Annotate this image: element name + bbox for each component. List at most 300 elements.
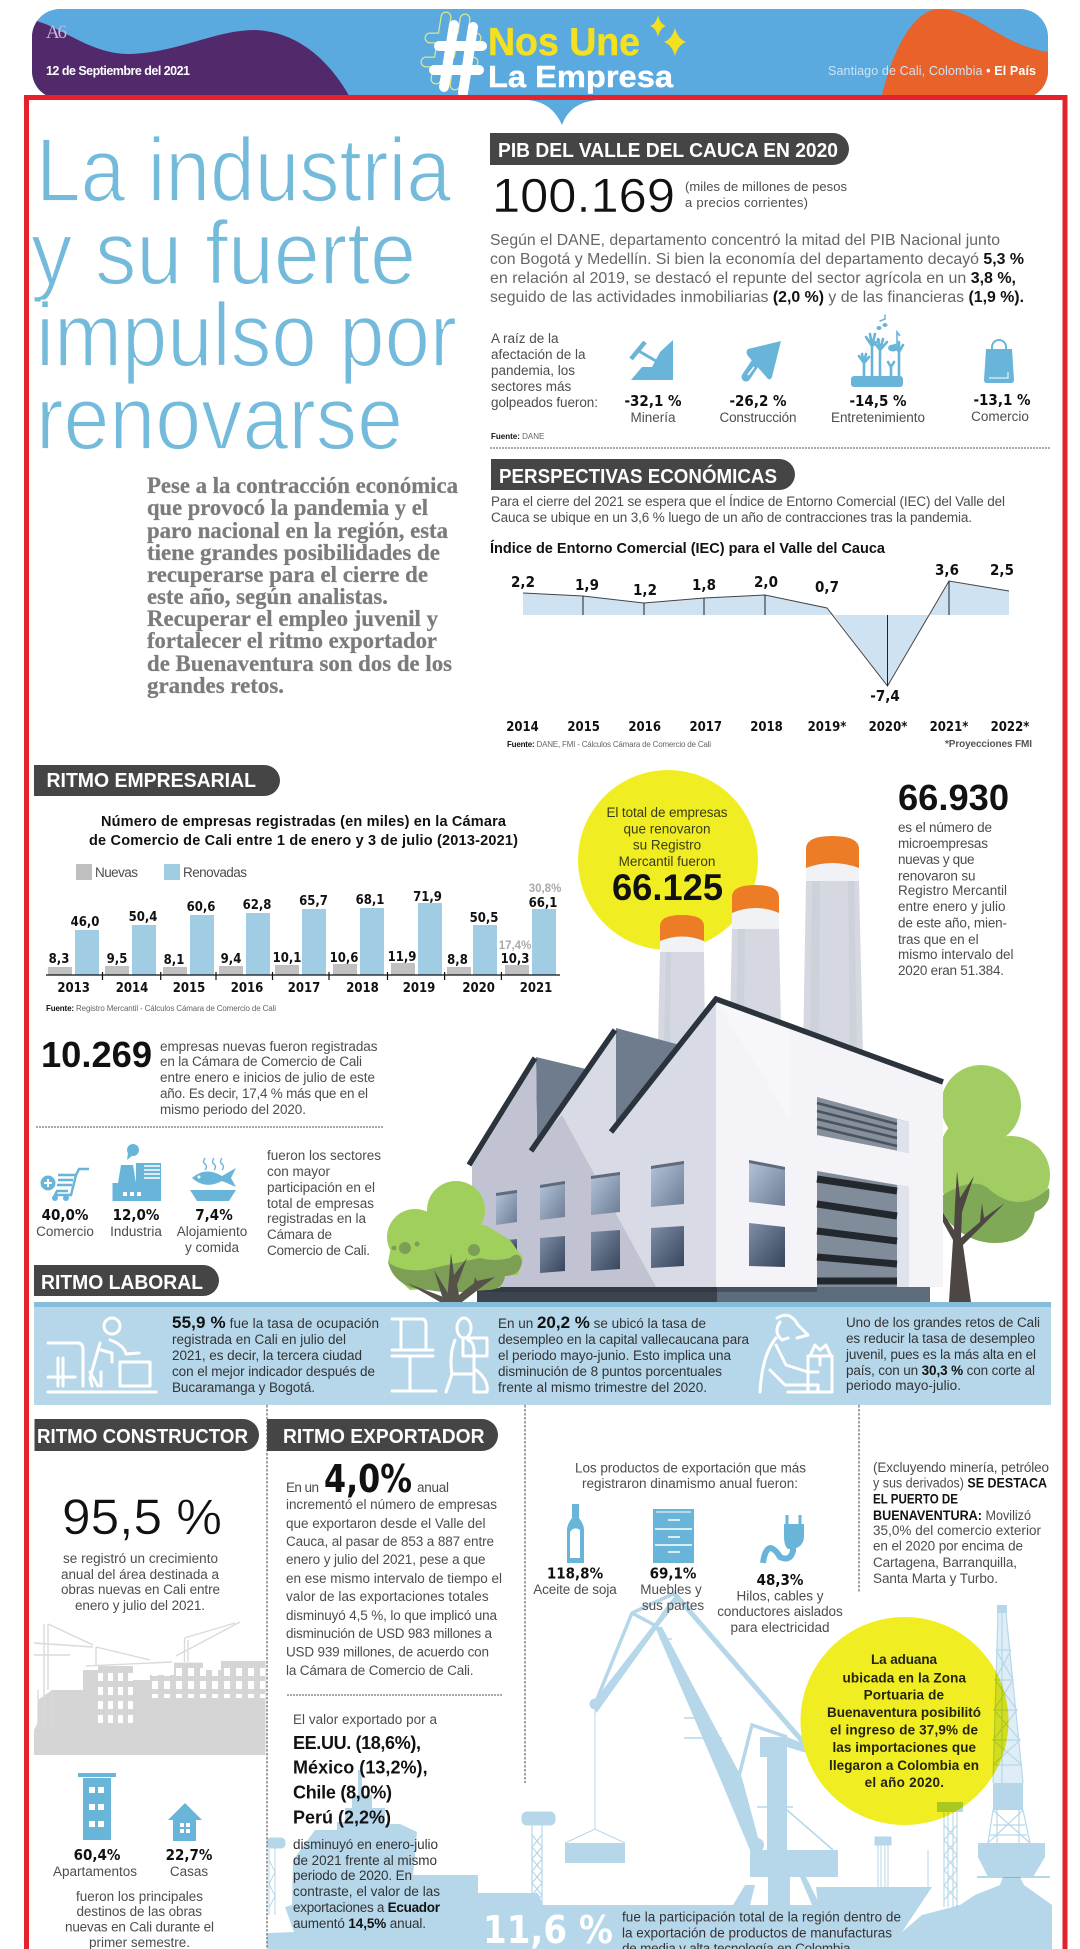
- text: occupancy: [172, 1313, 379, 1395]
- export decline text: aumentó 14,5% anual.: [293, 1916, 426, 1931]
- icon: hands and music: [851, 315, 903, 387]
- sector values: Entretenimiento: [831, 410, 925, 425]
- construction text: [65, 1889, 214, 1949]
- panel: ritmo exportador: [267, 1419, 1050, 1949]
- area chart: 2015: [567, 720, 600, 735]
- export destinations: EE.UU. (18,6%),: [293, 1733, 421, 1753]
- area chart: 2014: [506, 720, 539, 735]
- stat text: obras nuevas en Cali entre: [61, 1582, 220, 1597]
- Buenaventura text: en el 2020 por encima de: [873, 1539, 1023, 1554]
- callout text: [606, 805, 728, 908]
- bar chart title: [89, 814, 518, 849]
- sectors intro: A raíz de la: [491, 331, 559, 346]
- chimney 1: [658, 915, 705, 1045]
- stat 66.930: renovaron su: [898, 868, 976, 884]
- pointer under header: [528, 100, 598, 125]
- PIB heading: PIB DEL VALLE DEL CAUCA EN 2020: [498, 140, 838, 162]
- product values: Aceite de soja: [533, 1582, 617, 1597]
- text: youth unemployment: Uno de los grandes retos de Cali: [846, 1315, 1040, 1330]
- area chart: 0,7: [815, 578, 839, 596]
- bar chart: 2018: [346, 981, 379, 996]
- callout text: Mercantil fueron: [619, 854, 715, 869]
- perspectivas heading: PERSPECTIVAS ECONÓMICAS: [499, 464, 777, 488]
- stat text: [61, 1551, 220, 1613]
- exportador text: que exportaron desde el Valle del: [286, 1516, 486, 1531]
- sectors text: participación en el: [267, 1180, 375, 1195]
- PIB number: 100.169: [492, 170, 675, 223]
- bar chart: 2014: [116, 981, 148, 996]
- standfirst: tiene grandes posibilidades de: [147, 540, 440, 565]
- bar chart: 50,5: [470, 911, 498, 926]
- area chart: 1,8: [692, 576, 716, 594]
- stat 66.930: nuevas y que: [898, 852, 974, 867]
- callout 2 text: [827, 1652, 981, 1790]
- Buenaventura text: [873, 1460, 1049, 1586]
- text: occupancy: 55,9 % fue la tasa de ocupación: [172, 1313, 379, 1332]
- text: youth unemployment: [845, 1315, 1040, 1393]
- sector values: 12,0%: [113, 1206, 160, 1224]
- bar chart: 2020: [462, 981, 495, 996]
- stat 4,0%: [286, 1457, 449, 1501]
- port crane: [565, 1592, 838, 1905]
- stat text: se registró un crecimiento: [63, 1551, 218, 1566]
- icon: person with box: [392, 1318, 487, 1392]
- bar chart: 10,1: [273, 951, 301, 966]
- illustration: factory: [387, 836, 1050, 1302]
- panel: ritmo laboral: [34, 1265, 1051, 1405]
- stat 66.930: tras que en el: [898, 932, 979, 947]
- legend: Renovadas: [183, 865, 247, 880]
- bar chart: 11,9: [388, 950, 416, 965]
- rear roofs: [536, 1028, 680, 1140]
- bar chart: 2015: [173, 981, 205, 996]
- stat 66.930: de este año, mien-: [898, 916, 1007, 930]
- export destinations: México (13,2%),: [293, 1758, 428, 1778]
- stat text: enero y julio del 2021.: [75, 1598, 205, 1613]
- products intro: registraron dinamismo anual fueron:: [582, 1476, 798, 1491]
- main title: renovarse: [36, 369, 403, 469]
- icon: person at desk: [48, 1318, 156, 1392]
- Buenaventura text: Santa Marta y Turbo.: [873, 1571, 998, 1586]
- bar chart: 8,8: [447, 953, 468, 968]
- bar chart: 65,7: [299, 894, 328, 909]
- stat 66.930: 66.930: [898, 777, 1009, 818]
- bar chart title: de Comercio de Cali entre 1 de enero y 3 de julio (2013-2021): [89, 833, 518, 849]
- icon: trowel: [746, 341, 781, 379]
- Buenaventura text: BUENAVENTURA: Movilizó: [873, 1508, 1031, 1523]
- text: unemployment: desempleo en la capital vallecaucana para: [498, 1332, 749, 1347]
- bar chart: 8,3: [49, 952, 69, 967]
- area chart: -7,4: [870, 687, 900, 705]
- bar chart: 62,8: [243, 898, 271, 913]
- construction values: Apartamentos: [53, 1864, 137, 1879]
- standfirst: Pese a la contracción económica: [147, 473, 458, 498]
- sectors intro: sectores más: [491, 379, 572, 394]
- front wall: [716, 1000, 943, 1287]
- callout text: su Registro: [633, 838, 701, 853]
- standfirst: grandes retos.: [147, 673, 284, 698]
- standfirst: este año, según analistas.: [147, 584, 388, 609]
- panel: perspectivas: [490, 459, 1032, 750]
- PIB paragraph: [490, 232, 1024, 306]
- stat 66.930: es el número de: [898, 820, 992, 835]
- sector values: -14,5 %: [849, 392, 907, 410]
- standfirst: fortalecer el ritmo exportador: [147, 628, 437, 653]
- callout 2 text: llegaron a Colombia en: [829, 1758, 979, 1773]
- text: unemployment: [498, 1313, 749, 1395]
- bar chart: 2021: [520, 981, 552, 996]
- vertical dividers: [267, 1405, 859, 1949]
- main title: [31, 121, 457, 469]
- bar chart: 8,1: [164, 953, 184, 968]
- perspectivas text: Para el cierre del 2021 se espera que el Índice de Entorno Comercial (IEC) del Valle del: [491, 494, 1005, 509]
- chart title: Índice de Entorno Comercial (IEC) para el Valle del Cauca: [490, 540, 886, 557]
- text: unemployment: En un 20,2 % se ubicó la tasa de: [498, 1313, 706, 1332]
- side facade: [472, 1000, 716, 1287]
- date: 12 de Septiembre del 2021: [46, 64, 190, 78]
- exportador text: disminuyó 4,5 %, lo que implicó una: [286, 1608, 497, 1623]
- construction text: destinos de las obras: [76, 1904, 202, 1919]
- PIB unit: [685, 179, 848, 210]
- callout 2 text: La aduana: [871, 1652, 937, 1667]
- panel: ritmo empresarial: [34, 765, 561, 1258]
- callout 2 text: ubicada en la Zona: [842, 1671, 966, 1686]
- icon: bottle: [567, 1504, 584, 1563]
- Buenaventura text: 35,0% del comercio exterior: [873, 1523, 1042, 1538]
- hash logo: [426, 17, 482, 93]
- roller door: [817, 1171, 909, 1287]
- bar chart: 10,3: [501, 952, 529, 967]
- city silhouette: [34, 1622, 266, 1755]
- Buenaventura text: (Excluyendo minería, petróleo: [873, 1460, 1049, 1475]
- area chart: 3,6: [935, 561, 959, 579]
- export decline text: [293, 1837, 441, 1931]
- sector values: [624, 391, 1031, 425]
- bar chart: 2013: [57, 981, 90, 996]
- text: youth unemployment: es reducir la tasa de desempleo: [846, 1331, 1035, 1346]
- bar chart: 68,1: [356, 893, 384, 908]
- sector values: Construcción: [720, 410, 796, 425]
- panel: PIB: [490, 133, 1031, 441]
- text: unemployment: el periodo mayo-junio. Esto implica una: [498, 1348, 731, 1363]
- bar chart title: Número de empresas registradas (en miles) en la Cámara: [101, 814, 507, 830]
- export destinations: Perú (2,2%): [293, 1808, 391, 1828]
- sector values: Industria: [110, 1224, 162, 1239]
- Buenaventura text: Cartagena, Barranquilla,: [873, 1555, 1017, 1570]
- bar chart: 9,4: [221, 952, 241, 967]
- product values: 48,3%: [757, 1571, 804, 1589]
- stat 11,6 % text: [622, 1910, 901, 1949]
- export destinations: [293, 1712, 437, 1828]
- sector values: -13,1 %: [973, 391, 1031, 409]
- export decline text: disminuyó en enero-julio: [293, 1837, 438, 1852]
- stat 4,0%: 4,0%: [324, 1457, 412, 1501]
- bar chart: 9,5: [107, 952, 127, 967]
- callout 2 text: Portuaria de: [864, 1688, 944, 1703]
- source: Fuente: DANE: [491, 432, 544, 441]
- sectors text: Cámara de: [267, 1227, 332, 1242]
- sectors text: fueron los sectores: [267, 1148, 381, 1163]
- bar chart: 46,0: [71, 915, 99, 930]
- bar chart: 66,1: [529, 896, 557, 911]
- icon: shopping bag: [984, 340, 1014, 383]
- right tree: [937, 1065, 1050, 1302]
- icon: factory: [112, 1144, 161, 1201]
- empresarial heading: [34, 765, 280, 796]
- facade shadow: [472, 1062, 656, 1287]
- product values: para electricidad: [730, 1620, 830, 1635]
- stat 10.269: 10.269: [41, 1034, 152, 1075]
- area chart: 2,2: [511, 573, 535, 591]
- sector values: -26,2 %: [729, 392, 787, 410]
- port small tower: [522, 1812, 555, 1905]
- Buenaventura text: EL PUERTO DE: [873, 1492, 958, 1507]
- main title: La industria: [36, 121, 452, 221]
- callout text: El total de empresas: [606, 805, 728, 820]
- icon: worker packing: [760, 1315, 832, 1392]
- exportador heading: [267, 1419, 498, 1451]
- callout number: 66.125: [612, 867, 723, 908]
- bar chart: [46, 883, 561, 996]
- icon: cart: [40, 1169, 89, 1201]
- text: occupancy: registrada en Cali en julio del: [172, 1332, 346, 1347]
- PIB unit: (miles de millones de pesos: [685, 179, 848, 194]
- legend: Nuevas: [95, 865, 138, 880]
- stat 11,6 % text: fue la participación total de la región dentro de: [622, 1910, 901, 1925]
- callout 2 text: Buenaventura posibilitó: [827, 1705, 981, 1720]
- stat 66.930: 2020 eran 51.384.: [898, 963, 1004, 978]
- export destinations: Chile (8,0%): [293, 1782, 392, 1802]
- windows: [496, 1160, 785, 1273]
- PIB paragraph: en relación al 2019, se destacó el repunte del sector agrícola en un 3,8 %,: [490, 270, 1016, 287]
- export decline text: periodo de 2020. En: [293, 1868, 412, 1883]
- area chart: 2019*: [808, 720, 846, 735]
- export destinations: El valor exportado por a: [293, 1712, 437, 1727]
- callout 2 text: el año 2020.: [865, 1775, 944, 1790]
- bar chart: 2019: [403, 981, 435, 996]
- callout 2 text: el ingreso de 37,9% de: [830, 1723, 978, 1738]
- bar chart: 50,4: [129, 910, 157, 925]
- exportador heading: RITMO EXPORTADOR: [283, 1426, 485, 1448]
- sectors text: con mayor: [267, 1164, 331, 1179]
- sparkles: [650, 15, 686, 56]
- construction values: [53, 1846, 213, 1879]
- stat 10.269 text: [160, 1039, 378, 1117]
- text: occupancy: con el mejor indicador después de: [172, 1364, 375, 1379]
- sectors text: registradas en la: [267, 1211, 366, 1226]
- callout text: que renovaron: [623, 822, 711, 836]
- laboral heading: RITMO LABORAL: [41, 1272, 203, 1294]
- product values: 118,8%: [547, 1565, 604, 1583]
- PIB paragraph: con Bogotá y Medellín. Si bien la economía del departamento decayó 5,3 %: [490, 251, 1024, 268]
- icon: apartment: [78, 1773, 116, 1840]
- products intro: Los productos de exportación que más: [575, 1460, 806, 1476]
- sectors intro: afectación de la: [491, 347, 586, 362]
- bar chart: 10,6: [330, 951, 358, 966]
- stat 66.930: mismo intervalo del: [898, 947, 1014, 962]
- product values: 69,1%: [650, 1565, 697, 1583]
- products intro: [575, 1460, 806, 1491]
- bar chart: 71,9: [413, 890, 442, 905]
- sector values: Comercio: [971, 409, 1029, 424]
- main title: impulso por: [36, 286, 457, 386]
- sectors text: total de empresas: [267, 1196, 374, 1211]
- exportador text: en ese mismo intervalo de tiempo el: [286, 1571, 502, 1586]
- stat text: anual del área destinada a: [61, 1567, 219, 1582]
- export decline text: exportaciones a Ecuador: [293, 1900, 441, 1915]
- left tree: [387, 1181, 523, 1302]
- constructor heading: [34, 1419, 259, 1451]
- port left tower: [267, 1838, 285, 1915]
- sector values: 40,0%: [42, 1206, 89, 1224]
- stat 66.930: microempresas: [898, 836, 988, 851]
- standfirst: paro nacional en la región, esta: [147, 518, 448, 543]
- legend: [76, 864, 247, 880]
- text: unemployment: frente al mismo trimestre del 2020.: [498, 1380, 707, 1395]
- chimney 3: [803, 836, 863, 1055]
- area chart: 2,5: [990, 561, 1014, 579]
- stat 11,6 % text: la exportación de productos de manufacturas: [622, 1926, 892, 1940]
- stat 66.930: Registro Mercantil: [898, 883, 1007, 898]
- sector values: y comida: [185, 1240, 239, 1255]
- exportador text: USD 939 millones, de acuerdo con: [286, 1645, 489, 1660]
- product values: Hilos, cables y: [736, 1589, 824, 1604]
- icon: mining: [631, 340, 673, 380]
- exportador text: [286, 1497, 502, 1678]
- exportador text: Cauca, al pasar de 853 a 887 entre: [286, 1534, 494, 1549]
- chart source: Fuente: DANE, FMI - Cálculos Cámara de Comercio de Cali: [507, 740, 711, 749]
- standfirst: Recuperar el empleo juvenil y: [147, 606, 438, 631]
- exportador text: la Cámara de Comercio de Cali.: [286, 1663, 474, 1678]
- stat 10.269 text: año. Es decir, 17,4 % más que en el: [160, 1086, 368, 1101]
- PIB unit: a precios corrientes): [685, 195, 808, 210]
- icon: fish plate: [190, 1158, 236, 1201]
- PIB paragraph: Según el DANE, departamento concentró la mitad del PIB Nacional junto: [490, 232, 1000, 249]
- port right towers: [937, 1605, 1050, 1907]
- logo wordmark: Nos Une: [488, 21, 640, 64]
- text: occupancy: Bucaramanga y Bogotá.: [172, 1380, 315, 1395]
- sector values: Alojamiento: [177, 1224, 247, 1239]
- exportador text: disminución de USD 983 millones a: [286, 1626, 492, 1641]
- area chart: 2018: [750, 720, 783, 735]
- sectors text: [267, 1148, 381, 1258]
- standfirst: recuperarse para el cierre de: [147, 562, 428, 587]
- stat 10.269 text: entre enero e inicios de julio de este: [160, 1070, 375, 1085]
- bar chart: 2016: [231, 981, 263, 996]
- header banner: [32, 9, 1048, 99]
- chimney 2: [730, 885, 781, 1025]
- vent: [817, 1097, 909, 1153]
- construction text: fueron los principales: [76, 1889, 203, 1904]
- area chart: [506, 561, 1029, 735]
- projections note: *Proyecciones FMI: [945, 739, 1032, 750]
- bar chart: 60,6: [187, 900, 215, 915]
- bar chart: 17,4%: [499, 940, 531, 952]
- product values: sus partes: [642, 1598, 704, 1613]
- stat 4,0%: En un: [286, 1480, 319, 1495]
- location: Santiago de Cali, Colombia • El País: [828, 64, 1036, 78]
- logo wordmark second line: La Empresa: [488, 59, 674, 94]
- building base: [477, 1287, 930, 1302]
- exportador text: valor de las exportaciones totales: [286, 1589, 489, 1604]
- constructor heading: RITMO CONSTRUCTOR: [37, 1426, 249, 1448]
- sector values: 7,4%: [195, 1206, 233, 1224]
- port silhouette: [267, 1592, 1052, 1949]
- stat 66.930: entre enero y julio: [898, 899, 1006, 914]
- bar chart source: Fuente: Registro Mercantil - Cálculos Cámara de Comercio de Cali: [46, 1004, 276, 1013]
- stat 10.269 text: en la Cámara de Comercio de Cali: [160, 1054, 362, 1069]
- construction values: 22,7%: [166, 1846, 213, 1864]
- export decline text: de 2021 frente al mismo: [293, 1853, 437, 1868]
- standfirst: que provocó la pandemia y el: [147, 495, 428, 520]
- text: youth unemployment: juvenil, pues es la más alta en el: [845, 1347, 1036, 1362]
- sector values: Minería: [630, 410, 676, 425]
- area chart: 2021*: [930, 720, 968, 735]
- yellow callout: [578, 770, 758, 950]
- yellow callout 2: [800, 1617, 1008, 1825]
- export decline text: contraste, el valor de las: [293, 1884, 440, 1899]
- empresarial heading: RITMO EMPRESARIAL: [46, 770, 256, 792]
- area chart: 1,9: [575, 576, 599, 594]
- sectors intro: [491, 331, 598, 410]
- area chart: 2,0: [754, 573, 778, 591]
- sector values: Comercio: [36, 1224, 94, 1239]
- stat 10.269 text: mismo periodo del 2020.: [160, 1102, 306, 1117]
- area chart: 2022*: [991, 720, 1029, 735]
- stat 10.269 text: empresas nuevas fueron registradas: [160, 1039, 378, 1054]
- text: youth unemployment: periodo mayo-julio.: [846, 1378, 961, 1393]
- exportador text: incrementó el número de empresas: [286, 1497, 497, 1512]
- product values: [533, 1565, 843, 1635]
- bar chart: 30,8%: [529, 883, 561, 895]
- PIB paragraph: seguido de las actividades inmobiliarias (2,0 %) y de las financieras (1,9 %).: [490, 289, 1024, 306]
- area chart: 2017: [690, 720, 722, 735]
- roof lines: [469, 999, 943, 1165]
- standfirst: [147, 473, 458, 698]
- exportador text: enero y julio del 2021, pese a que: [286, 1552, 486, 1567]
- area chart: 2016: [628, 720, 661, 735]
- sectors intro: pandemia, los: [491, 363, 575, 378]
- text: youth unemployment: país, con un 30,3 % con corte al: [846, 1363, 1035, 1378]
- Buenaventura text: y sus derivados) SE DESTACA: [873, 1476, 1047, 1490]
- sectors text: Comercio de Cali.: [267, 1243, 370, 1258]
- standfirst: de Buenaventura son dos de los: [147, 651, 452, 676]
- text: unemployment: disminución de 8 puntos porcentuales: [498, 1364, 722, 1379]
- stat 66.930: [898, 777, 1014, 978]
- sector values: [36, 1206, 247, 1255]
- PIB heading: [490, 133, 849, 165]
- area chart: 1,2: [633, 581, 657, 599]
- sector values: -32,1 %: [624, 392, 682, 410]
- perspectivas text: Cauca se ubique en un 3,6 % luego de un año de contracciones tras la pandemia.: [491, 510, 972, 525]
- perspectivas heading: [491, 459, 795, 490]
- sectors intro: golpeados fueron:: [491, 395, 598, 410]
- construction text: nuevas en Cali durante el: [65, 1920, 214, 1934]
- icon: house: [168, 1803, 202, 1841]
- product values: Muebles y: [640, 1582, 702, 1597]
- stat 95,5 %: 95,5 %: [62, 1489, 222, 1545]
- construction values: Casas: [170, 1864, 208, 1879]
- text: occupancy: 2021, es decir, la tercera ciudad: [172, 1348, 362, 1363]
- area chart: 2020*: [869, 720, 907, 735]
- page tag: A6: [46, 22, 67, 43]
- panel: ritmo constructor: [34, 1419, 266, 1949]
- callout 2 text: las importaciones que: [832, 1740, 976, 1755]
- perspectivas text: [491, 494, 1005, 525]
- blue band: [34, 1302, 1051, 1405]
- main title: y su fuerte: [31, 204, 416, 304]
- icon: plug: [763, 1515, 804, 1563]
